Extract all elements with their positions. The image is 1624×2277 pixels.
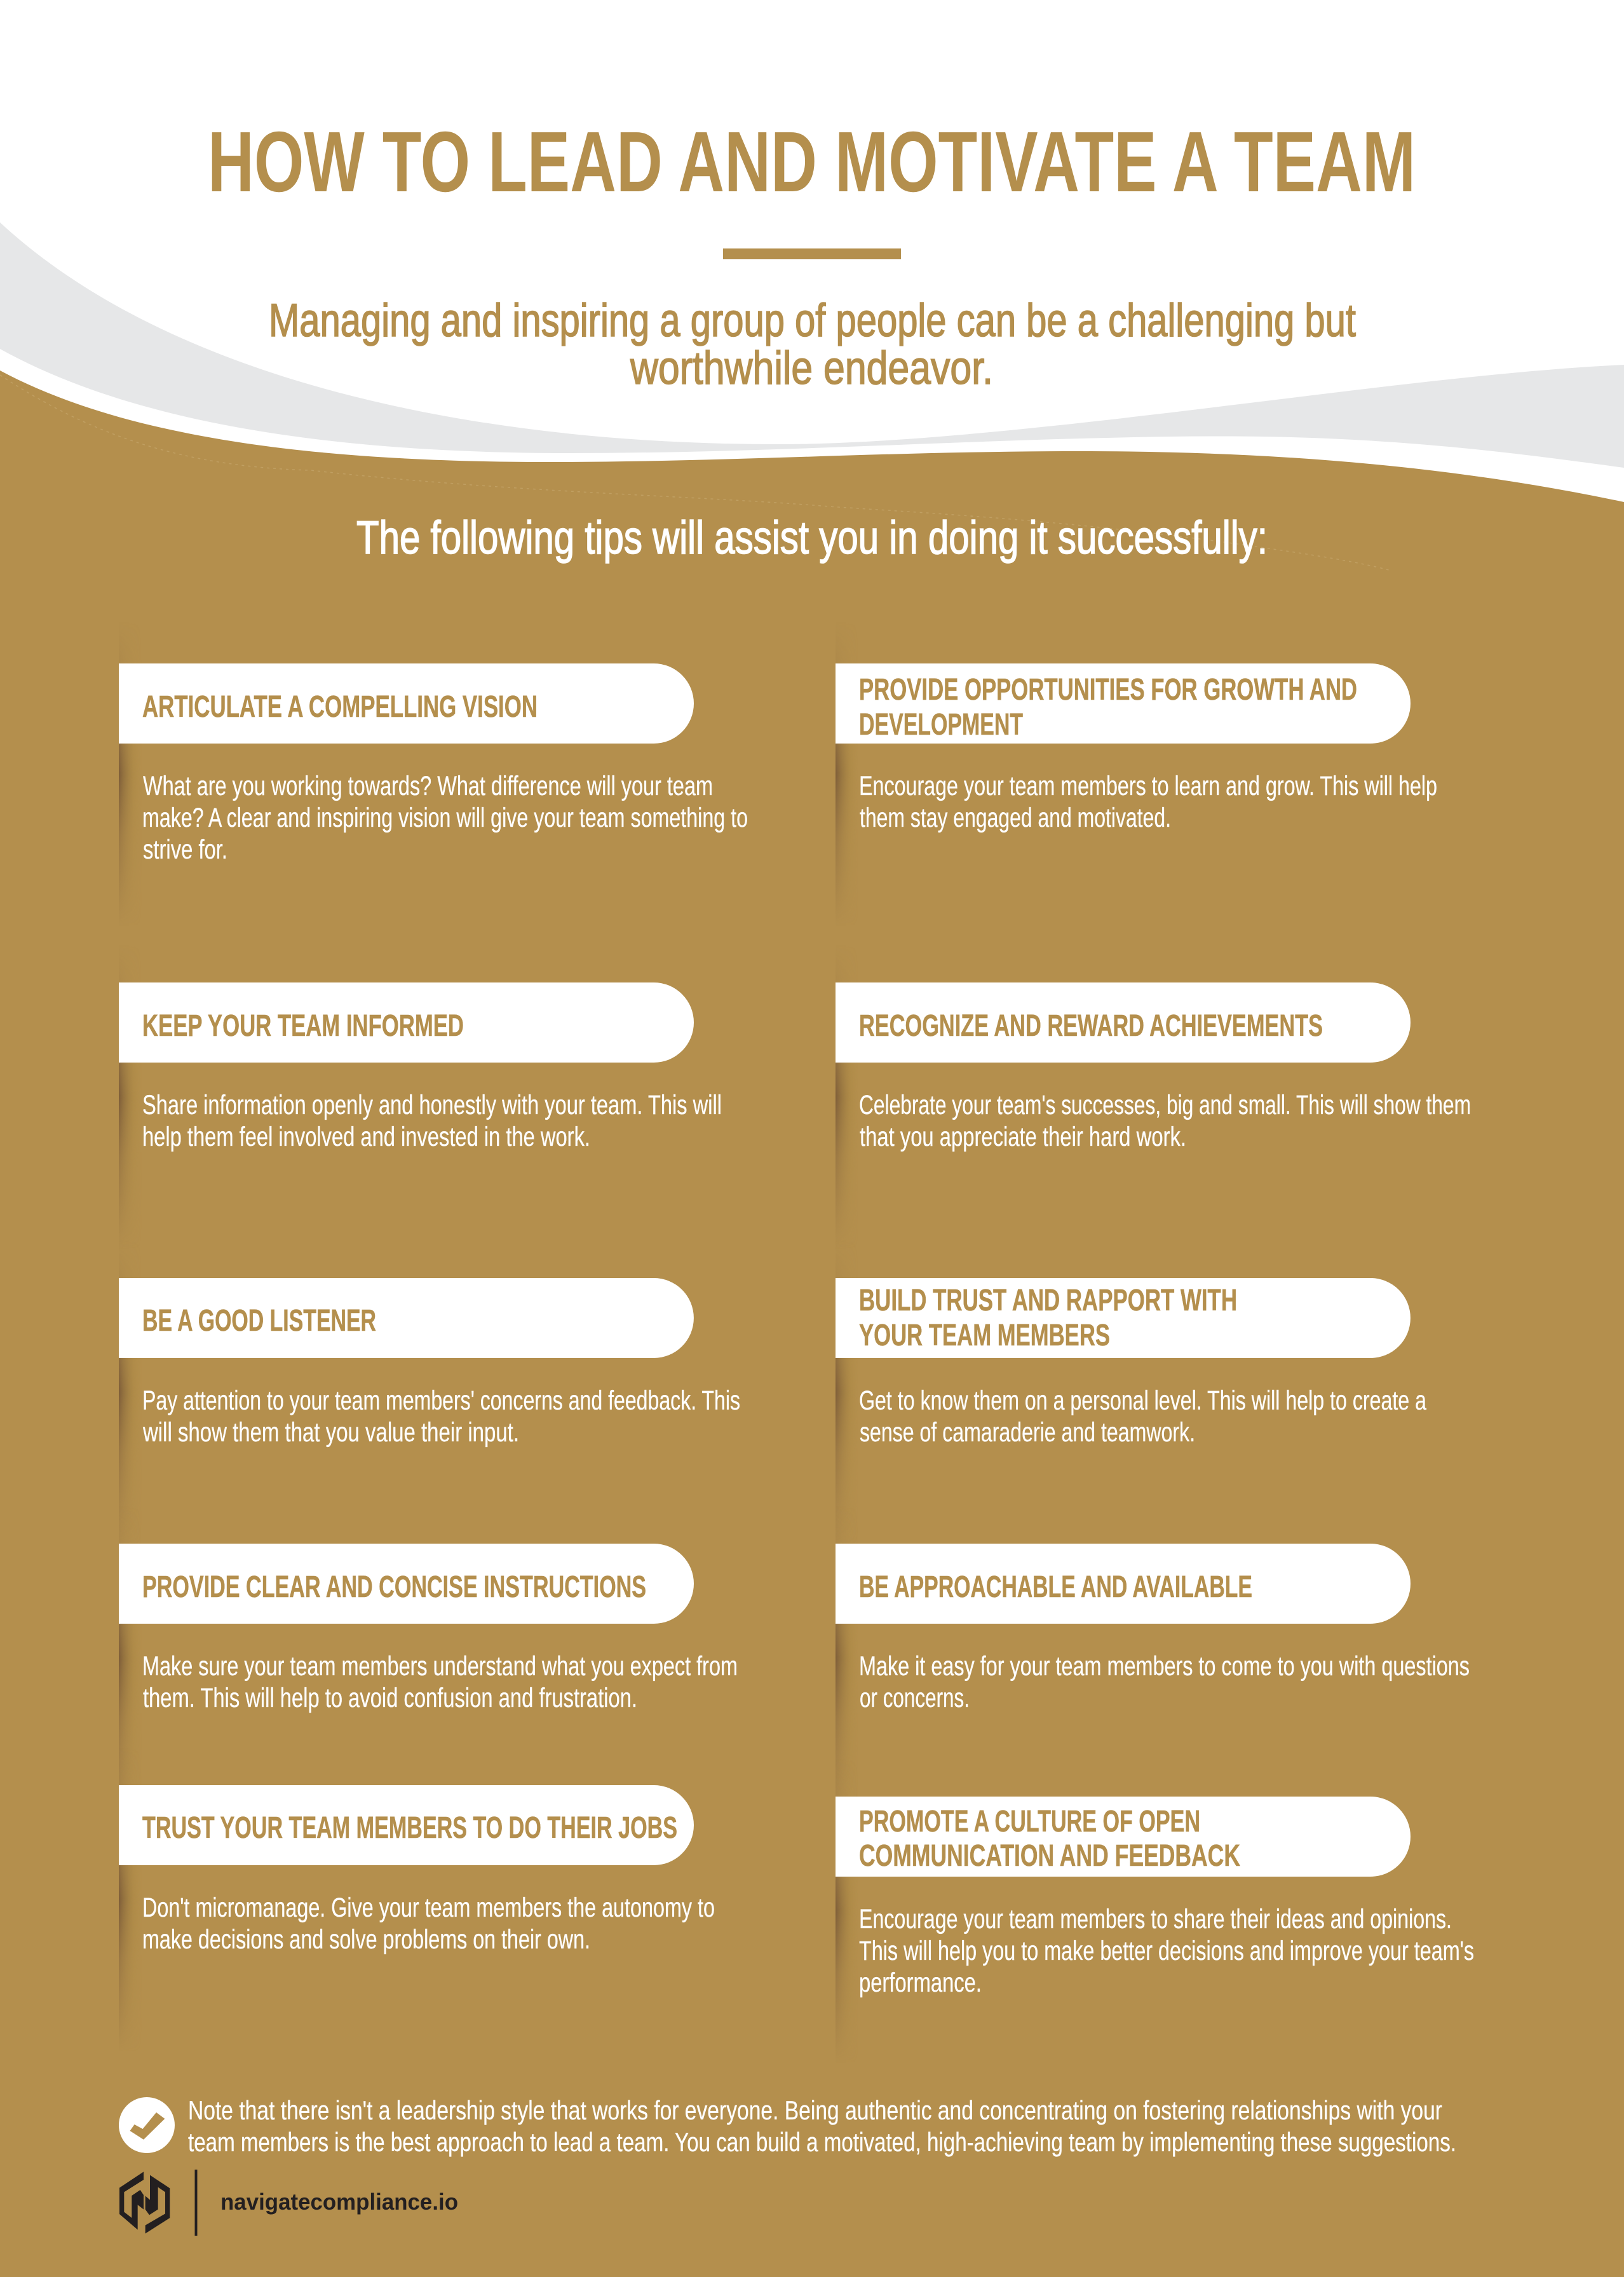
tip: trust your team members xyxy=(119,1747,715,2052)
logo divider xyxy=(194,2170,197,2236)
tip: provide clear and concise instructions: PROVIDE CLEAR AND CONCISE INSTRUCTIONS xyxy=(142,1570,646,1604)
tip: be a good listener xyxy=(119,1240,740,1545)
tip: be approachable and available: or concerns. xyxy=(860,1683,970,1713)
title divider bar xyxy=(723,248,901,259)
tip: provide opportunities for growth: DEVELOPMENT xyxy=(859,708,1023,742)
tip: trust your team members: Don't micromanage. Give your team members the autonomy to xyxy=(142,1893,715,1923)
tip: be approachable and available xyxy=(836,1506,1470,1811)
brand name: navigatecompliance.io xyxy=(220,2189,458,2215)
tip: be a good listener: BE A GOOD LISTENER xyxy=(142,1304,376,1338)
tip: promote a culture of open communication: performance. xyxy=(859,1968,982,1998)
tip: provide opportunities for growth: Encourage your team members to learn and grow. This will help xyxy=(859,771,1437,801)
tip: recognize and reward achievements: that you appreciate their hard work. xyxy=(860,1122,1186,1152)
subtitle: Managing and inspiring a group of people can be a challenging but xyxy=(269,295,1356,346)
tip: build trust and rapport: Get to know them on a personal level. This will help to create a xyxy=(859,1385,1426,1416)
subtitle xyxy=(269,295,1356,394)
tip: recognize and reward achievements: RECOGNIZE AND REWARD ACHIEVEMENTS xyxy=(859,1009,1323,1043)
tip: be a good listener: will show them that you value their input. xyxy=(142,1417,519,1448)
tip: build trust and rapport xyxy=(836,1240,1426,1545)
tip: provide opportunities for growth xyxy=(836,663,1437,897)
tip: trust your team members: TRUST YOUR TEAM MEMBERS TO DO THEIR JOBS xyxy=(142,1811,677,1845)
tip: articulate a compelling vision: make? A clear and inspiring vision will give your team something to xyxy=(142,803,748,833)
closing note xyxy=(188,2095,1456,2157)
tip: promote a culture of open communication: PROMOTE A CULTURE OF OPEN xyxy=(859,1805,1200,1839)
tip: build trust and rapport: YOUR TEAM MEMBERS xyxy=(859,1319,1110,1352)
tip: build trust and rapport: BUILD TRUST AND RAPPORT WITH xyxy=(859,1284,1237,1317)
tip: build trust and rapport: sense of camaraderie and teamwork. xyxy=(860,1417,1195,1448)
tip: be approachable and available: BE APPROACHABLE AND AVAILABLE xyxy=(859,1570,1252,1604)
grey wave xyxy=(0,222,1624,468)
tip: articulate a compelling vision xyxy=(119,622,748,927)
tip: promote a culture of open communication xyxy=(836,1797,1473,2034)
tip: articulate a compelling vision: strive for. xyxy=(143,834,227,865)
tip: keep your team informed xyxy=(119,944,722,1249)
tip: provide opportunities for growth: them stay engaged and motivated. xyxy=(860,803,1171,833)
icon: check mark badge xyxy=(119,2097,175,2153)
tip: provide clear and concise instructions: them. This will help to avoid confusion and frustration. xyxy=(143,1683,637,1713)
subtitle: worthwhile endeavor. xyxy=(630,343,993,394)
tip: keep your team informed: KEEP YOUR TEAM INFORMED xyxy=(142,1009,464,1043)
tip: articulate a compelling vision: What are you working towards? What difference will your team xyxy=(143,771,713,801)
tip: provide clear and concise instructions: Make sure your team members understand what you expect from xyxy=(142,1651,738,1682)
tip: provide opportunities for growth: PROVIDE OPPORTUNITIES FOR GROWTH AND xyxy=(859,673,1357,707)
tip: be a good listener: Pay attention to your team members' concerns and feedback. This xyxy=(142,1385,740,1416)
tip: trust your team members: make decisions and solve problems on their own. xyxy=(142,1924,590,1955)
tip: promote a culture of open communication: COMMUNICATION AND FEEDBACK xyxy=(859,1839,1240,1873)
tip: keep your team informed: help them feel involved and invested in the work. xyxy=(142,1122,590,1152)
tip: provide clear and concise instructions xyxy=(119,1506,738,1811)
tip: recognize and reward achievements xyxy=(836,944,1471,1249)
icon: navigate compliance logo xyxy=(119,2172,170,2234)
section intro heading: The following tips will assist you in doing it successfully: xyxy=(356,512,1268,564)
tip: keep your team informed: Share information openly and honestly with your team. This will xyxy=(142,1090,722,1120)
tip: articulate a compelling vision: ARTICULATE A COMPELLING VISION xyxy=(142,690,538,724)
